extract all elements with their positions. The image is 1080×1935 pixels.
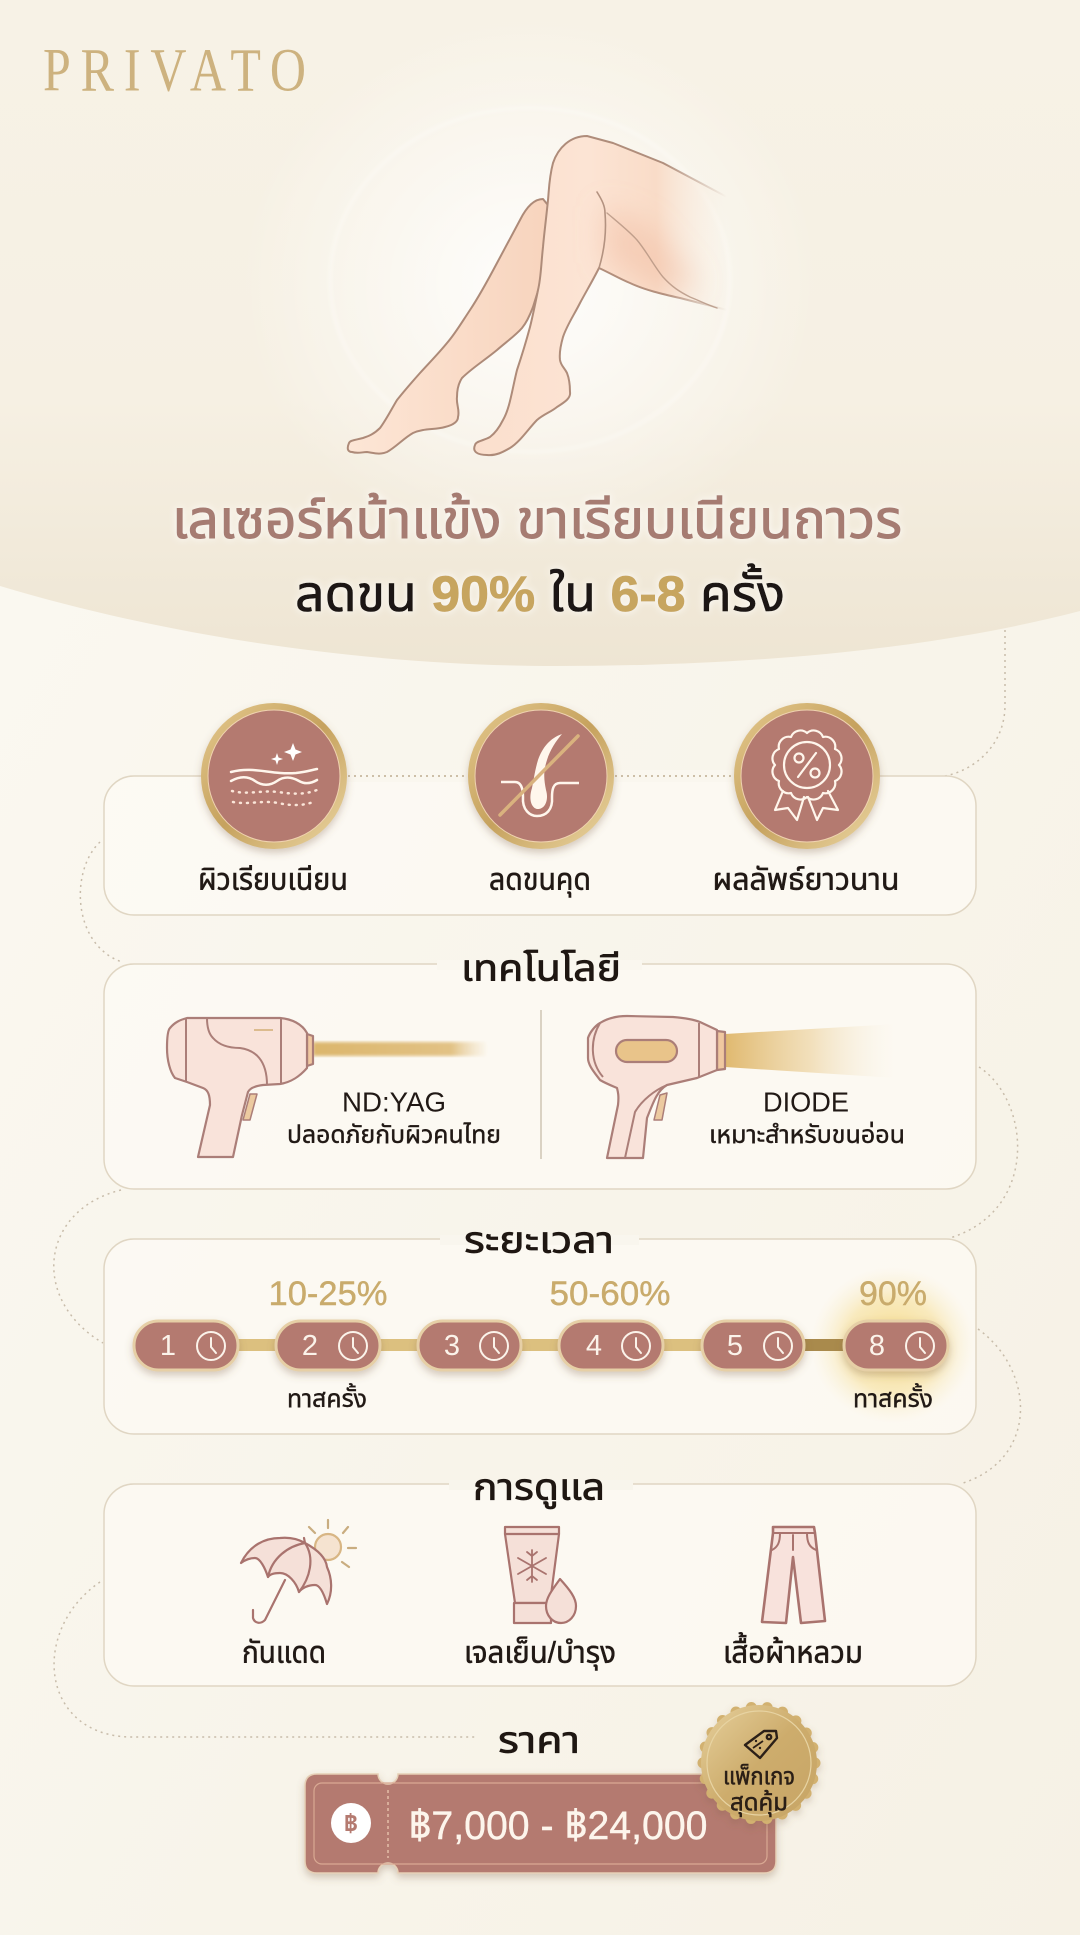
price range: ฿7,000 - ฿24,000 (408, 1804, 708, 1848)
hero background (0, 0, 1080, 666)
icon: baht coin: ฿ (344, 1810, 358, 1838)
headline line 1: เลเซอร์หน้าแข้ง ขาเรียบเนียนถาวร (172, 490, 902, 550)
session numbers: 2 (302, 1330, 318, 1362)
aftercare labels: เสื้อผ้าหลวม (723, 1632, 863, 1670)
glow around last session (811, 1267, 975, 1423)
icon: baht coin (331, 1803, 371, 1843)
DIODE text (709, 1086, 905, 1149)
benefit labels: ลดขนคุด (489, 864, 591, 898)
benefit labels (198, 864, 900, 898)
session numbers: 5 (727, 1330, 743, 1362)
icon: umbrella and sun (241, 1520, 356, 1623)
icon: long-lasting results badge (734, 703, 880, 849)
icon: discount tag (745, 1731, 777, 1758)
panel: benefits (104, 703, 976, 915)
icon: gel tube and droplet (505, 1527, 576, 1623)
reduction percentages (268, 1275, 927, 1313)
headline line 2: ลดขน 90% ใน 6-8 ครั้ง (295, 563, 785, 622)
session numbers (160, 1330, 885, 1362)
badge: best value package (701, 1705, 817, 1821)
aftercare labels (242, 1632, 863, 1670)
heading: aftercare: การดูแล (473, 1466, 605, 1510)
icon: loose pants (762, 1527, 825, 1623)
badge text: สุดคุ้ม (730, 1790, 788, 1818)
heading: price: ราคา (498, 1720, 580, 1760)
badge text: แพ็กเกจ (723, 1762, 795, 1790)
title (172, 490, 902, 622)
ND:YAG text: ND:YAG (342, 1086, 446, 1118)
benefit labels: ผลลัพธ์ยาวนาน (712, 864, 900, 896)
aftercare labels: กันแดด (242, 1636, 326, 1670)
illustration: legs (348, 136, 727, 455)
price ticket (305, 1774, 776, 1873)
heading: duration: ระยะเวลา (464, 1220, 614, 1260)
aftercare labels: เจลเย็น/บำรุง (464, 1636, 616, 1670)
timeline connector (185, 1339, 895, 1351)
logo: PRIVATO: PRIVATO (43, 37, 306, 105)
icon: DIODE handpiece (588, 1016, 896, 1158)
DIODE text: เหมาะสำหรับขนอ่อน (709, 1121, 905, 1149)
panel: technology (104, 948, 976, 1189)
session numbers: 8 (869, 1330, 885, 1362)
clock icons (197, 1332, 934, 1360)
apply each session labels (287, 1382, 933, 1413)
reduction percentages: 90% (859, 1275, 927, 1313)
apply each session labels: ทาสครั้ง (287, 1382, 367, 1413)
icon: smooth skin (201, 703, 347, 849)
benefit labels: ผิวเรียบเนียน (198, 864, 348, 896)
connector dotted paths (54, 630, 1020, 1737)
session numbers: 4 (586, 1330, 602, 1362)
icon: ND:YAG handpiece (167, 1018, 486, 1157)
panel: aftercare (104, 1466, 976, 1686)
reduction percentages: 50-60% (550, 1275, 670, 1313)
panel: duration timeline (104, 1220, 976, 1434)
session numbers: 3 (444, 1330, 460, 1362)
session numbers: 1 (160, 1330, 176, 1362)
reduction percentages: 10-25% (268, 1275, 388, 1313)
ND:YAG text (287, 1086, 501, 1149)
session pills (134, 1321, 948, 1370)
icon: reduce ingrown hair (468, 703, 614, 849)
badge text (723, 1762, 795, 1818)
heading: technology: เทคโนโลยี (461, 948, 621, 988)
DIODE text: DIODE (763, 1086, 849, 1118)
ND:YAG text: ปลอดภัยกับผิวคนไทย (287, 1121, 501, 1149)
apply each session labels: ทาสครั้ง (853, 1382, 933, 1413)
